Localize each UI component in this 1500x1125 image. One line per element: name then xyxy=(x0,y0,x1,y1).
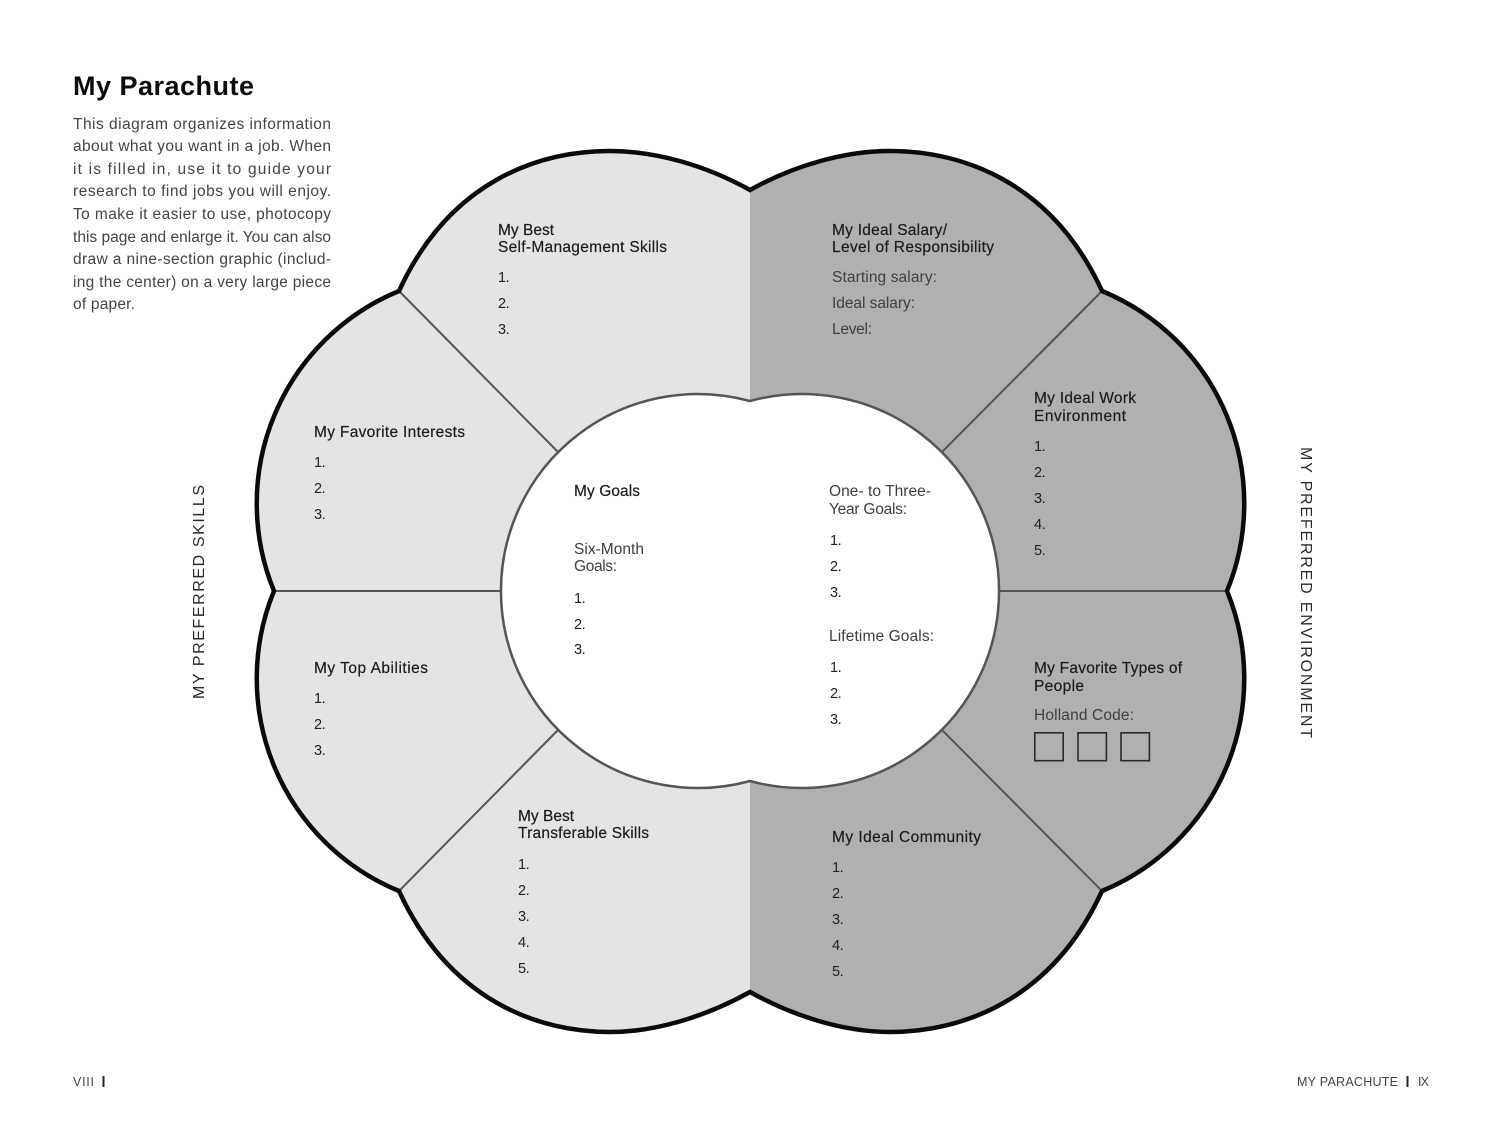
panel: my ideal work environment xyxy=(942,291,1244,591)
footer: left page number xyxy=(73,1075,104,1089)
panel: my ideal community xyxy=(750,730,1102,1032)
footer: right running head and page number: MY PARACHUTE xyxy=(1297,1075,1398,1089)
panel: center my goals: 3. xyxy=(574,642,585,658)
panel: my ideal community: 1. xyxy=(832,860,843,876)
panel: my ideal work environment: 1. xyxy=(1034,439,1045,455)
panel: center my goals: 1. xyxy=(574,591,585,607)
panel: my ideal work environment: 4. xyxy=(1034,517,1045,533)
panel: my favorite types of people: My Favorite Types of xyxy=(1034,660,1183,677)
panel: center my goals: 2. xyxy=(830,686,841,702)
panel: my favorite interests: 2. xyxy=(314,481,325,497)
holland code boxes xyxy=(1035,733,1149,761)
panel: my top abilities: 1. xyxy=(314,691,325,707)
panel: my ideal community: 3. xyxy=(832,912,843,928)
panel: my top abilities xyxy=(257,591,558,891)
panel: my ideal salary and level of responsibility: Level: xyxy=(832,321,872,338)
panel: my best self-management skills: 2. xyxy=(498,296,509,312)
panel: center my goals xyxy=(501,394,999,788)
panel: my best transferable skills: 2. xyxy=(518,883,529,899)
panel: my favorite interests: 3. xyxy=(314,507,325,523)
footer: right running head and page number: IX xyxy=(1418,1075,1430,1089)
panel: my best transferable skills: 3. xyxy=(518,909,529,925)
panel: center my goals: Year Goals: xyxy=(829,501,907,518)
panel: center my goals: 1. xyxy=(830,660,841,676)
panel: my best transferable skills: 5. xyxy=(518,961,529,977)
panel: my best transferable skills: 1. xyxy=(518,857,529,873)
panel: center my goals: Goals: xyxy=(574,558,617,575)
side label: my preferred skills: MY PREFERRED SKILLS xyxy=(191,485,208,699)
panel: my best self-management skills: 3. xyxy=(498,322,509,338)
panel: my ideal work environment: Environment xyxy=(1034,408,1127,425)
panel: my best transferable skills: My Best xyxy=(518,808,575,825)
panel: my ideal community: My Ideal Community xyxy=(832,829,981,846)
footer: left page number: VIII xyxy=(73,1075,94,1089)
intro text block: research to find jobs you will enjoy. xyxy=(73,183,331,200)
panel: center my goals: 3. xyxy=(830,585,841,601)
panel: my favorite types of people: Holland Code: xyxy=(1034,707,1134,724)
panel: center my goals: 3. xyxy=(830,712,841,728)
panel: center my goals: 2. xyxy=(830,559,841,575)
panel: center my goals: My Goals xyxy=(574,483,640,500)
title: My Parachute xyxy=(73,71,254,101)
intro text block: it is filled in, use it to guide your xyxy=(73,161,331,178)
panel: my ideal community: 5. xyxy=(832,964,843,980)
panel: my ideal salary and level of responsibility: My Ideal Salary/ xyxy=(832,222,948,239)
panel: my ideal salary and level of responsibility: Level of Responsibility xyxy=(832,239,994,256)
intro text block: ing the center) on a very large piece xyxy=(73,274,331,291)
panel: my favorite types of people xyxy=(942,591,1244,891)
panel: center my goals: Six-Month xyxy=(574,541,644,558)
panel: my best self-management skills xyxy=(399,151,750,452)
panel: my favorite interests xyxy=(257,291,558,591)
panel: my best self-management skills: My Best xyxy=(498,222,555,239)
intro text block: To make it easier to use, photocopy xyxy=(73,206,331,223)
panel: my ideal work environment: My Ideal Work xyxy=(1034,390,1136,407)
panel: my ideal work environment: 2. xyxy=(1034,465,1045,481)
panel: my top abilities: My Top Abilities xyxy=(314,660,428,677)
panel: center my goals: 1. xyxy=(830,533,841,549)
intro text block: of paper. xyxy=(73,296,135,313)
panel: center my goals: Lifetime Goals: xyxy=(829,628,934,645)
panel: my top abilities: 3. xyxy=(314,743,325,759)
flower outline xyxy=(257,151,1244,1032)
panel: my ideal work environment: 3. xyxy=(1034,491,1045,507)
panel: my best transferable skills: Transferable Skills xyxy=(518,825,649,842)
panel: my ideal work environment: 5. xyxy=(1034,543,1045,559)
panel: my favorite interests: My Favorite Interests xyxy=(314,424,465,441)
intro text block: this page and enlarge it. You can also xyxy=(73,229,331,246)
intro text block: This diagram organizes information xyxy=(73,116,331,133)
intro text block xyxy=(73,116,331,313)
side label: my preferred environment: MY PREFERRED ENVIRONMENT xyxy=(1297,447,1314,738)
panel: my ideal salary and level of responsibility: Ideal salary: xyxy=(832,295,915,312)
panel: my favorite types of people: People xyxy=(1034,678,1084,695)
panel: center my goals: One- to Three- xyxy=(829,483,931,500)
panel: my best self-management skills: 1. xyxy=(498,270,509,286)
panel: my best self-management skills: Self-Management Skills xyxy=(498,239,667,256)
panel: my ideal community: 2. xyxy=(832,886,843,902)
panel: my ideal salary and level of responsibility: Starting salary: xyxy=(832,269,937,286)
intro text block: draw a nine-section graphic (includ- xyxy=(73,251,331,268)
panel: my favorite interests: 1. xyxy=(314,455,325,471)
panel: my top abilities: 2. xyxy=(314,717,325,733)
panel: center my goals: 2. xyxy=(574,617,585,633)
panel: my ideal salary and level of responsibility xyxy=(750,151,1102,452)
panel: my best transferable skills: 4. xyxy=(518,935,529,951)
panel: my best transferable skills xyxy=(399,730,750,1032)
intro text block: about what you want in a job. When xyxy=(73,138,331,155)
panel: my ideal community: 4. xyxy=(832,938,843,954)
